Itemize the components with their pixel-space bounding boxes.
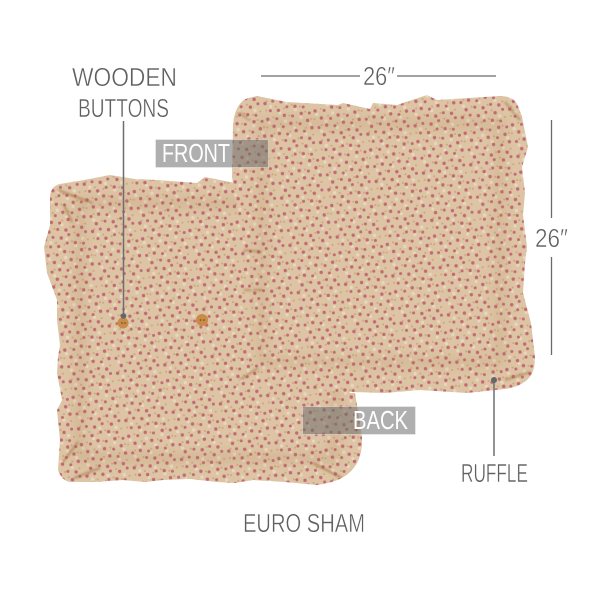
label: front tag: FRONT — [162, 138, 230, 168]
panel: front sham pillow — [232, 95, 535, 393]
icon: wooden button right — [196, 314, 208, 326]
infographic canvas — [44, 67, 568, 532]
callout: ruffle — [461, 377, 528, 488]
callout: ruffle: RUFFLE — [461, 458, 528, 488]
icon: wooden button left — [118, 318, 128, 328]
dimension: height 26 inches: 26″ — [535, 223, 568, 253]
dimension: width 26 inches: 26″ — [363, 61, 395, 91]
caption: euro sham: EURO SHAM — [243, 508, 365, 538]
label: back tag: BACK — [353, 405, 409, 435]
heading: wooden buttons callout: BUTTONS — [78, 93, 169, 123]
arrow: ruffle leader — [491, 377, 497, 456]
arrow: wooden buttons leader — [121, 121, 126, 319]
panel: back sham pillow — [44, 175, 362, 485]
heading: wooden buttons callout — [72, 62, 177, 319]
label: back tag — [302, 405, 416, 435]
heading: wooden buttons callout: WOODEN — [72, 62, 177, 92]
